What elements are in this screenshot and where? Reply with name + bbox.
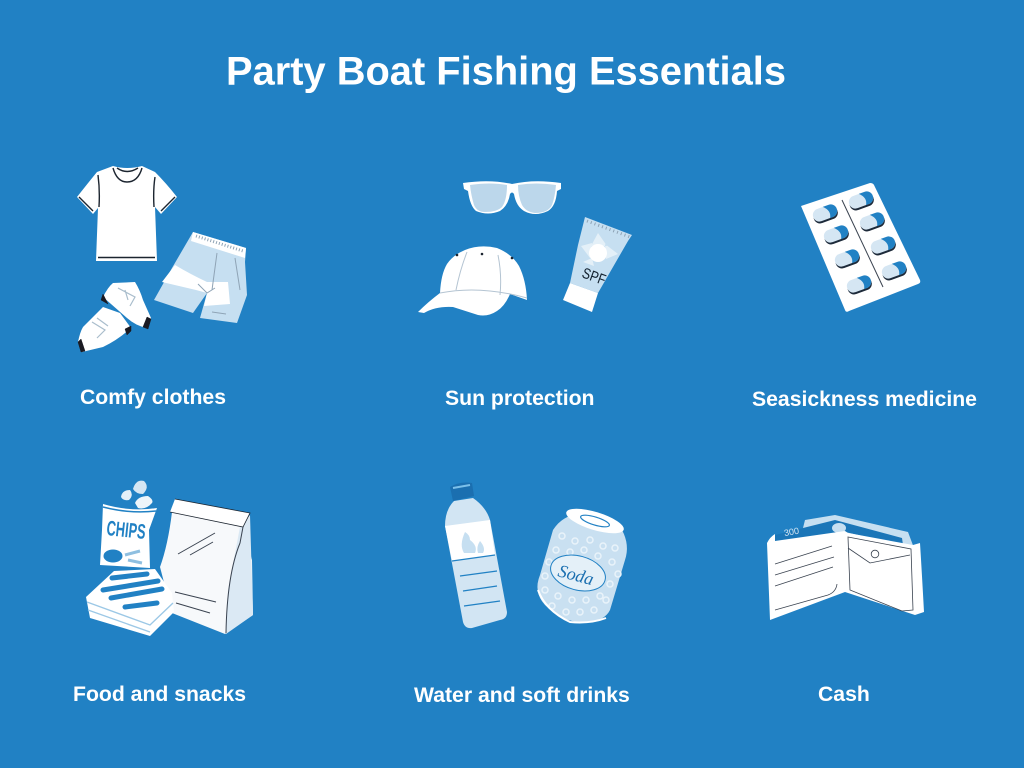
icon: chips bag: CHIPS bbox=[105, 517, 147, 544]
icon: sunscreen tube: SPF bbox=[580, 265, 608, 289]
icon: sneakers bbox=[78, 282, 151, 352]
panel: comfy clothes bbox=[77, 166, 247, 352]
icon: water bottle bbox=[445, 482, 507, 628]
panel: cash bbox=[767, 515, 924, 620]
icon: cap bbox=[418, 246, 527, 316]
icon: sunscreen tube bbox=[563, 217, 632, 312]
label: seasickness medicine: Seasickness medicine bbox=[752, 388, 977, 411]
label: water and soft drinks: Water and soft drinks bbox=[414, 684, 630, 707]
icon: blister pack bbox=[801, 183, 920, 312]
icon: shorts bbox=[154, 232, 247, 323]
icon: soda can bbox=[537, 504, 627, 622]
icon: paper bag bbox=[160, 499, 253, 634]
icon: chips bag bbox=[100, 481, 157, 568]
panel: water and soft drinks bbox=[445, 482, 627, 628]
icon: soda can: Soda bbox=[556, 561, 596, 589]
icon: sunglasses bbox=[463, 181, 561, 214]
icon: t-shirt bbox=[77, 166, 177, 261]
title: Party Boat Fishing Essentials bbox=[226, 50, 786, 94]
panel: sun protection bbox=[418, 181, 632, 316]
label: cash: Cash bbox=[818, 683, 870, 706]
label: food and snacks: Food and snacks bbox=[73, 683, 246, 706]
label: comfy clothes: Comfy clothes bbox=[80, 386, 226, 409]
label: sun protection: Sun protection bbox=[445, 387, 594, 410]
panel: seasickness medicine bbox=[801, 183, 920, 312]
icon: sandwich bbox=[86, 569, 174, 636]
panel: food and snacks bbox=[86, 481, 253, 636]
icon: wallet bbox=[767, 515, 924, 620]
icon: wallet: 300 bbox=[783, 526, 800, 538]
